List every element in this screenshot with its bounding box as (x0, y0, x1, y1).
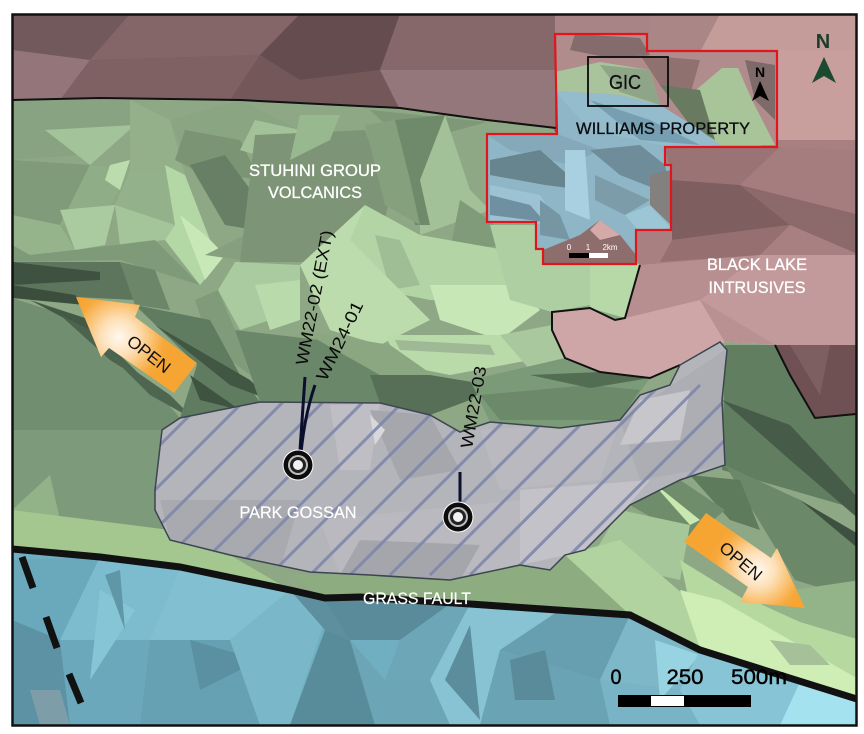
inset scale bar: 0 (567, 243, 572, 252)
zone: Park Gossan (154, 341, 728, 581)
label Grass Fault: GRASS FAULT (363, 589, 471, 608)
inset north arrow (752, 64, 769, 101)
geological contact lines (12, 98, 856, 418)
inset north arrow: N (755, 64, 765, 80)
main north arrow (812, 31, 836, 83)
lower left (14, 430, 164, 529)
label Park Gossan: PARK GOSSAN (240, 503, 356, 522)
main scale bar: 250 (666, 666, 704, 689)
arrow: open southeast (684, 513, 805, 608)
label Stuhini Group Volcanics: VOLCANICS (268, 183, 362, 202)
main scale bar: 0 (610, 666, 622, 689)
inferred fault dashes (22, 557, 81, 703)
label Black Lake Intrusives: INTRUSIVES (708, 278, 806, 297)
arrow: open northwest (76, 297, 197, 393)
main scale bar: 500m (731, 666, 787, 689)
label WM22-03: WM22-03 (457, 365, 490, 450)
arrow: open southeast: OPEN (715, 538, 766, 585)
Grass Fault line (12, 549, 860, 700)
label Williams Property: WILLIAMS PROPERTY (576, 119, 750, 138)
inset scale bar (567, 243, 618, 258)
big olive flat (240, 130, 390, 262)
label Black Lake Intrusives: BLACK LAKE (707, 255, 807, 274)
label GIC: GIC (609, 72, 641, 94)
terrain: maroon upper unit (14, 16, 856, 140)
label Stuhini Group Volcanics (250, 164, 380, 198)
inset: Williams Property map (487, 34, 777, 264)
right dark (722, 345, 860, 510)
GIC box (588, 57, 668, 106)
label WM22-02 (EXT): WM22-02 (EXT) (292, 229, 337, 367)
centre light (350, 205, 506, 300)
drill holes WM22-02 and WM24-01 (282, 377, 315, 480)
terrain: Black Lake intrusives (540, 140, 860, 420)
main scale bar (610, 666, 787, 707)
dark left band (12, 262, 135, 300)
label WM24-01: WM24-01 (313, 298, 367, 384)
label Black Lake Intrusives (708, 258, 806, 294)
label Stuhini Group Volcanics: STUHINI GROUP (249, 161, 381, 180)
property boundary (487, 34, 777, 264)
inset scale bar: 1 (586, 243, 591, 252)
main north arrow: N (816, 31, 830, 53)
arrow: open northwest: OPEN (123, 332, 174, 377)
drill hole WM22-03 (442, 472, 474, 532)
terrain: blue lower unit (12, 545, 862, 734)
upper left facets (12, 100, 130, 160)
inset scale bar: 2km (602, 243, 618, 252)
